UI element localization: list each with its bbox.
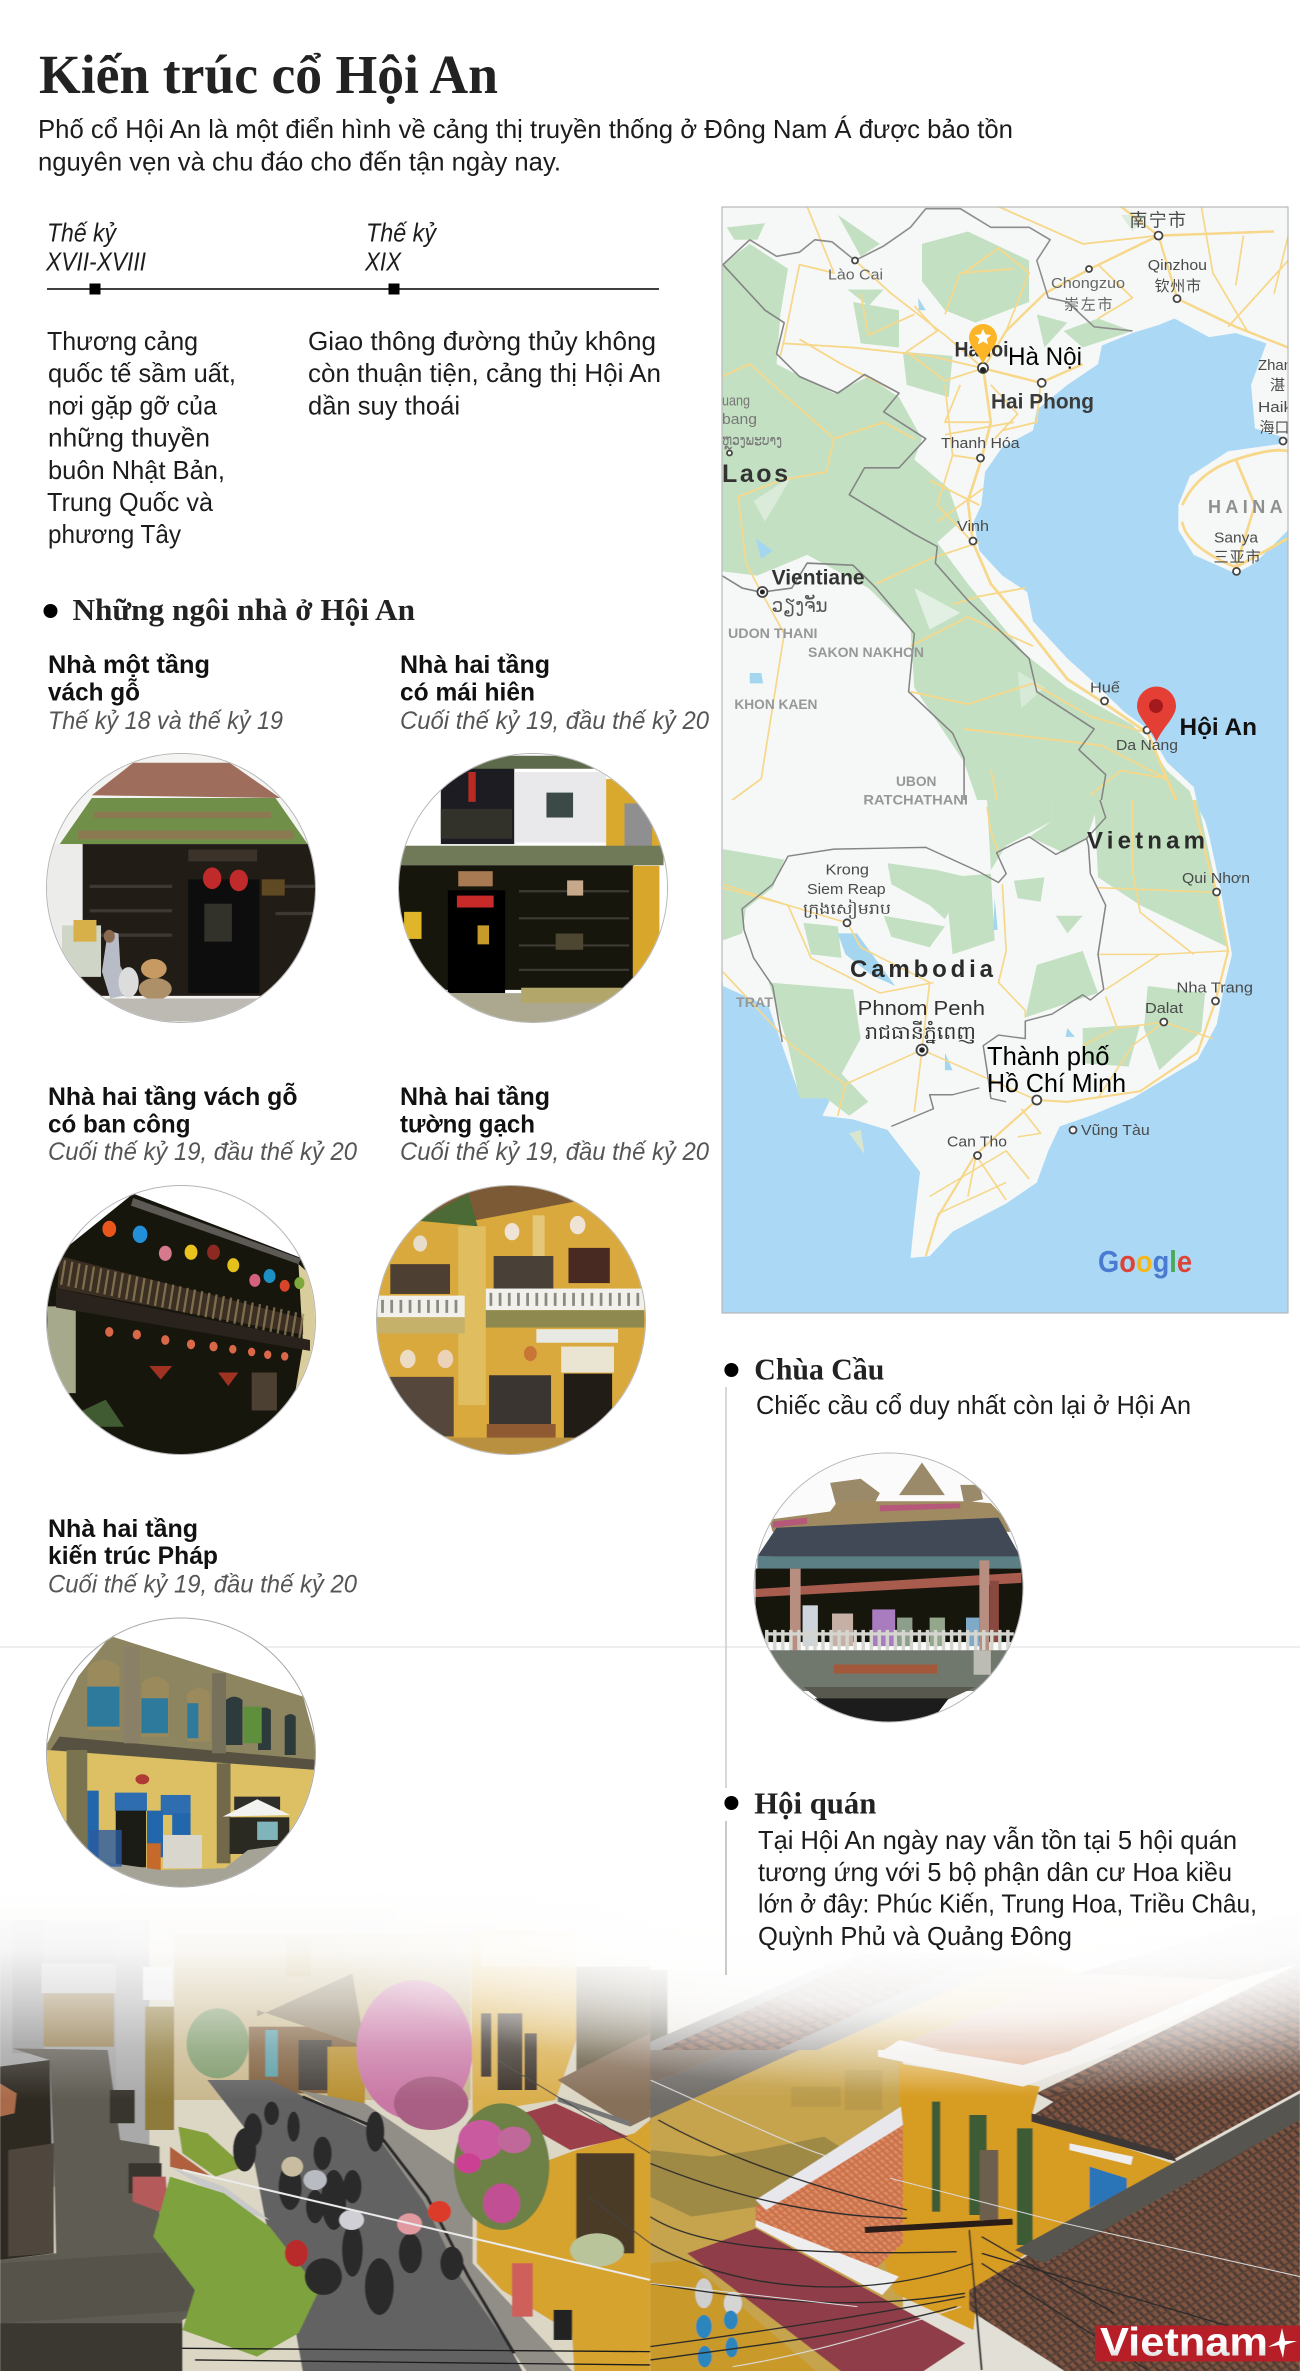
period text 1: Thương cảng [47,326,198,356]
photo mist base [0,2003,1300,2371]
map labels: Qinzhou [1148,257,1207,274]
period text 1 [47,326,236,549]
period text 2: Giao thông đường thủy không [308,326,656,356]
map labels: Sanya [1214,529,1259,546]
map labels: Zhan [1258,357,1292,374]
timeline axis [47,288,659,290]
map labels: TRAT [736,994,773,1010]
house type 5 caption: Nhà hai tầng [48,1515,198,1543]
section: Hội quán [724,1786,1257,1951]
house type 4 caption: Nhà hai tầng [400,1083,550,1111]
period text 1: Trung Quốc và [47,487,214,517]
map labels: Nha Trang [1176,979,1253,996]
house type 3 caption: có ban công [48,1110,190,1138]
period text 2 [308,326,661,420]
map labels: Lào Cai [828,266,883,284]
section: Hội quán: Hội quán [754,1786,876,1820]
house type 4 caption: tường gạch [400,1110,535,1138]
house type 3 caption: Cuối thế kỷ 19, đầu thế kỷ 20 [48,1138,357,1166]
period text 2: dần suy thoái [308,390,460,420]
horizontal guide line [0,1646,1300,1648]
map labels [722,210,1300,1151]
period label 2 [364,218,438,276]
period label 1: XVII-XVIII [45,246,146,276]
photo: two-storey brick house [374,1183,652,1459]
period label 2: XIX [364,246,402,276]
map labels: ວຽງຈັນ [772,594,828,617]
house type 1 caption [48,651,283,735]
map labels: ຫຼວງພະບາງ [722,432,782,449]
period label 1: Thế kỷ [47,218,118,248]
map labels: Laos [722,460,788,488]
map labels: Qui Nhơn [1182,870,1250,887]
map labels: Vientiane [772,567,865,590]
marker XIX [388,284,400,294]
map border [722,207,1288,1313]
map labels: Da Nang [1116,737,1178,754]
map labels: UDON THANI [728,625,818,641]
map labels: Thanh Hóa [941,435,1020,452]
house type 4 caption [400,1083,709,1166]
assembly hall description: Quỳnh Phủ và Quảng Đông [758,1921,1072,1951]
photo: two-storey house with porch roof [395,752,670,1023]
house type 2 caption [400,651,709,735]
period text 1: quốc tế sầm uất, [48,358,236,388]
icon: plus mark [1268,2328,1297,2358]
section heading: houses: Những ngôi nhà ở Hội An [72,592,415,627]
house type 1 caption: Nhà một tầng [48,651,210,679]
title: Kiến trúc cổ Hội An [39,44,498,105]
custom city labels: Thành phố [987,1041,1110,1071]
house type 4 caption: Cuối thế kỷ 19, đầu thế kỷ 20 [400,1138,709,1166]
map labels: Vinh [957,518,989,535]
map labels: bang [722,411,757,428]
Google logo: Google [1098,1244,1192,1279]
map labels: Vietnam [1087,827,1205,854]
icon: Hoi An pin [1137,686,1176,742]
period text 1: những thuyền [48,422,210,452]
photo: covered bridge [750,1450,1029,1728]
map labels: Siem Reap [807,881,886,898]
house type 5 caption [48,1515,357,1598]
intro text: Phố cổ Hội An là một điển hình về cảng thị truyền thống ở Đông Nam Á được bảo tồn [38,114,1013,144]
southern land and roads [722,800,1232,1258]
house type 5 caption: kiến trúc Pháp [48,1542,218,1570]
map labels: UBON [896,773,936,789]
map labels: 崇左市 [1064,296,1112,313]
map labels: SAKON NAKHON [808,644,924,660]
map labels: ក្រុងសៀមរាប [803,899,891,919]
map labels: Chongzuo [1051,275,1125,292]
icon: Hanoi star pin [969,324,997,364]
capital dots [760,367,986,1053]
roofs and yellow wall, upper right [649,1970,1300,2353]
section: Chùa Cầu [724,1352,1191,1420]
map labels: HAINAN [1208,497,1300,517]
map labels: Haik [1258,399,1293,416]
section: Chùa Cầu: Chiếc cầu cổ duy nhất còn lại ở Hội An [756,1390,1191,1420]
period label 1 [45,218,146,276]
house type 3 caption [48,1081,357,1166]
sea [722,318,1288,1312]
map labels: រាជធានីភ្នំពេញ [865,1020,976,1044]
map labels: Dalat [1145,1000,1184,1017]
period text 1: buôn Nhật Bản, [48,455,225,485]
left street scene [0,1900,650,2371]
section: Chùa Cầu: Chùa Cầu [754,1352,884,1387]
map labels: Huế [1090,680,1121,696]
assembly hall description: Tại Hội An ngày nay vẫn tồn tại 5 hội quán [758,1825,1237,1855]
map labels: RATCHATHANI [863,791,968,807]
period label 2: Thế kỷ [366,218,438,248]
photo white fade [0,1850,1300,2100]
house type 1 caption: Thế kỷ 18 và thế kỷ 19 [48,707,283,735]
map labels: 三亚市 [1214,549,1261,566]
map labels: Hai Phong [991,390,1094,414]
map labels: Hanoi [954,339,1008,362]
label: Hội An: Hội An [1180,714,1257,741]
map labels: Krong [826,861,869,878]
timeline [45,218,661,549]
map labels: Can Tho [947,1134,1007,1151]
northern land and roads [722,207,1288,840]
map labels: uang [722,393,750,410]
map labels: KHON KAEN [734,696,817,712]
assembly hall description [758,1825,1257,1951]
custom city labels [988,1045,1124,1092]
map labels: Vũng Tàu [1081,1122,1150,1139]
bottom street photo [0,1933,1300,2371]
house type 5 caption: Cuối thế kỷ 19, đầu thế kỷ 20 [48,1570,357,1598]
map labels: 钦州市 [1155,278,1201,295]
photo: one-storey wooden house [46,752,317,1023]
period text 1: phương Tây [48,519,181,549]
map labels: Cambodia [850,956,994,983]
map labels: 海口 [1260,420,1290,436]
assembly hall description: lớn ở đây: Phúc Kiến, Trung Hoa, Triều Châu, [758,1889,1257,1919]
house type 1 caption: vách gỗ [48,676,140,706]
label: Hà Nội: Hà Nội [1008,343,1082,371]
side vertical rule 1 [725,1387,727,1788]
marker XVII-XVIII [90,284,100,294]
photo: French-style two-storey house [46,1618,317,1887]
photo haze, upper right [300,1725,1300,2095]
intro text: nguyên vẹn và chu đáo cho đến tận ngày nay. [38,146,561,176]
period text 2: còn thuận tiện, cảng thị Hội An [308,358,661,388]
right roofs detail [650,2050,1300,2371]
custom city labels: Hồ Chí Minh [987,1068,1126,1098]
photo: two-storey wooden house with balcony [46,1186,317,1459]
city markers [727,232,1286,1159]
period text 1: nơi gặp gỡ của [48,390,218,420]
house type 2 caption: có mái hiên [400,678,535,706]
assembly hall description: tương ứng với 5 bộ phận dân cư Hoa kiều [758,1857,1232,1887]
map labels: Phnom Penh [858,998,985,1020]
map labels: 湛 [1270,377,1285,394]
house type 2 caption: Nhà hai tầng [400,651,550,679]
map labels: 南宁市 [1129,210,1186,230]
Vietnam+ logo: Vietnam [1100,2320,1268,2364]
house type 2 caption: Cuối thế kỷ 19, đầu thế kỷ 20 [400,707,709,735]
side vertical rule 2 [725,1821,727,1975]
intro text [38,114,1013,176]
house type 3 caption: Nhà hai tầng vách gỗ [48,1081,298,1111]
map panel [722,207,1300,1313]
